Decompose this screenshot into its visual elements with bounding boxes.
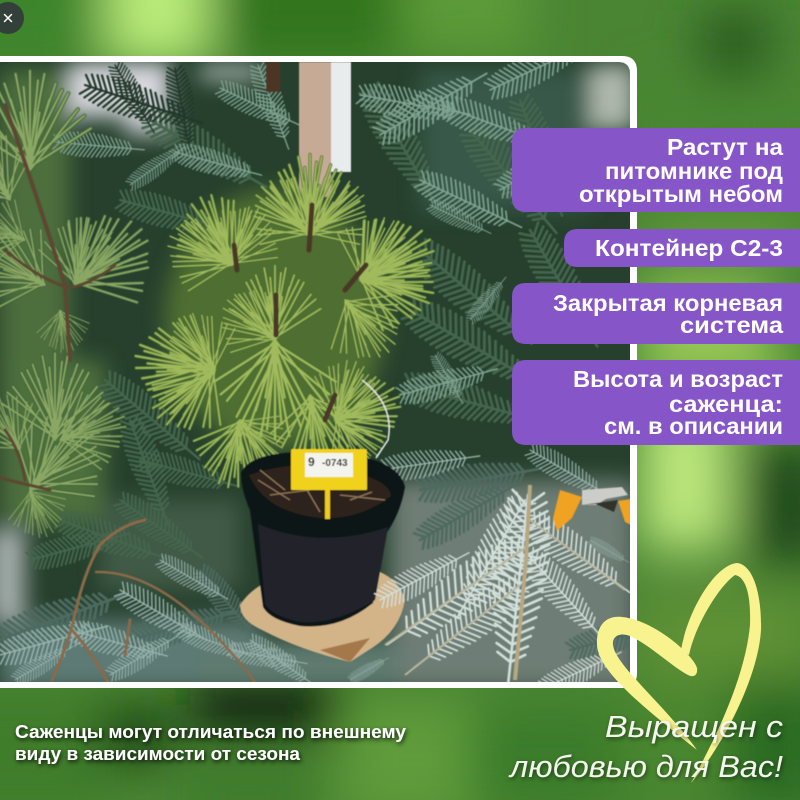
info badge: container xyxy=(564,229,800,267)
info badge: growing conditions: открытым небом xyxy=(579,181,783,207)
sky and foliage tones xyxy=(0,62,635,690)
pruning shears xyxy=(553,487,631,531)
soil xyxy=(249,465,391,518)
info badge: height and age: Высота и возраст xyxy=(573,366,783,392)
central pine light needles xyxy=(127,154,455,494)
info badge: root system xyxy=(512,283,800,344)
info badge: growing conditions: Растут на xyxy=(667,134,783,160)
yellow plant tag: -0743 xyxy=(322,458,348,469)
central pine buds xyxy=(234,205,366,420)
info badge: root system: система xyxy=(680,312,783,338)
slogan xyxy=(508,709,784,784)
fir over stump xyxy=(244,633,389,682)
info badge: root system: Закрытая корневая xyxy=(553,290,783,316)
wood stump xyxy=(240,565,405,662)
central pine deep needles xyxy=(127,154,455,494)
ground fir branches xyxy=(0,452,671,664)
left pine trunk and branches xyxy=(0,105,115,490)
measuring ruler xyxy=(331,62,351,172)
black plant pot xyxy=(241,452,405,627)
main foreground fir xyxy=(373,484,630,682)
info badge: growing conditions xyxy=(512,128,800,212)
spruce branches, light layer xyxy=(52,29,610,422)
left pine needles xyxy=(0,69,150,486)
wooden stake xyxy=(299,62,331,197)
info badge: height and age: саженца: xyxy=(669,391,783,417)
info badge: growing conditions: питомнике под xyxy=(605,158,783,184)
yellow plant tag xyxy=(291,449,367,519)
seasonal note xyxy=(15,722,406,764)
seasonal note: виду в зависимости от сезона xyxy=(15,744,301,764)
white photo frame xyxy=(0,56,637,688)
seasonal note: Саженцы могут отличаться по внешнему xyxy=(15,722,406,742)
slogan: любовью для Вас! xyxy=(508,749,783,784)
icon: yellow heart xyxy=(597,563,761,783)
yellow plant tag: 9 xyxy=(308,455,315,469)
info badge: height and age: см. в описании xyxy=(604,413,783,439)
brown twigs xyxy=(52,520,255,682)
photo: pine seedling in pot xyxy=(0,62,630,682)
close button xyxy=(0,2,24,34)
spruce branches, deep layer xyxy=(25,79,613,574)
info badge: height and age xyxy=(512,360,800,445)
slogan: Выращен с xyxy=(605,709,784,744)
info badge: container: Контейнер С2-3 xyxy=(595,235,783,261)
